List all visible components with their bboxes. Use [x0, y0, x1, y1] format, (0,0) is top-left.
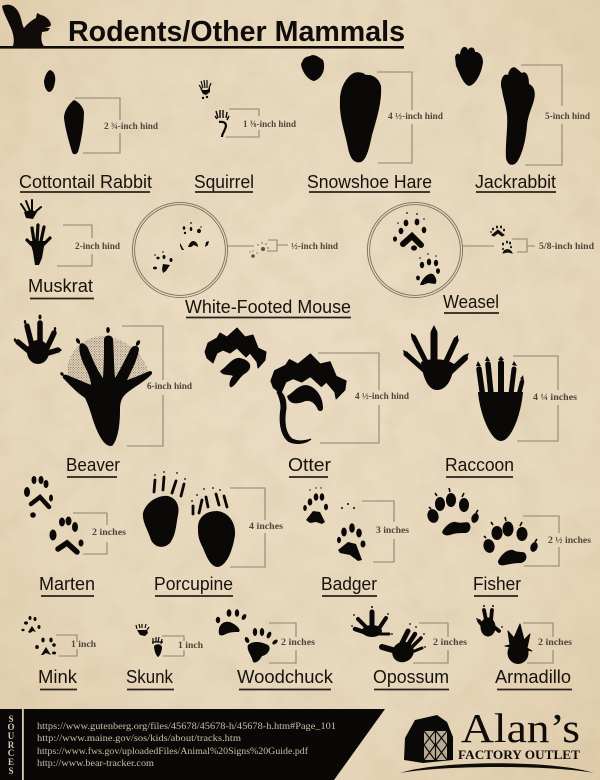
icon: actual size front track: [490, 226, 505, 236]
icon: hind track: [27, 225, 50, 265]
source links: https://www.fws.gov/uploadedFiles/Animal%20Signs%20Guide.pdf: [37, 746, 308, 756]
source links: http://www.bear-tracker.com: [37, 758, 154, 768]
heading: Fisher: [473, 574, 521, 594]
size label: 1 inch: [178, 640, 203, 650]
icon: enlarged track upper: [393, 212, 426, 251]
size label: 2 inches: [281, 637, 316, 647]
sources vertical label: C: [8, 748, 14, 758]
icon: front track: [21, 200, 41, 219]
size bracket: [377, 72, 412, 163]
panel: raccoon: [403, 325, 578, 477]
heading: Otter: [288, 455, 331, 475]
panel: white-footed mouse: [132, 202, 351, 318]
panel: muskrat: [21, 200, 120, 298]
size bracket: [73, 513, 107, 554]
sources vertical label: [7, 714, 15, 776]
size label: 1 inch: [71, 639, 96, 649]
icon: barn: [404, 715, 453, 763]
icon: hind track: [271, 354, 346, 443]
heading: Skunk: [126, 667, 174, 687]
size label: ½-inch hind: [291, 241, 338, 251]
icon: front track: [216, 609, 247, 636]
size label: 1 ⅜-inch hind: [243, 119, 296, 129]
logo: Alan's Factory Outlet: [400, 705, 594, 773]
size label: 4 ¼ inches: [533, 392, 578, 402]
icon: actual size hind track: [502, 240, 512, 253]
icon: front track: [351, 606, 393, 637]
heading: Opossum: [373, 667, 449, 687]
heading: Mink: [38, 667, 78, 687]
panel: cottontail rabbit: [19, 70, 158, 192]
heading: White-Footed Mouse: [185, 297, 351, 317]
panel: weasel: [367, 202, 594, 313]
panel: skunk: [126, 624, 203, 690]
icon: front track: [14, 314, 62, 364]
icon: hind track: [482, 517, 539, 565]
sources vertical label: R: [8, 740, 15, 750]
heading: Porcupine: [154, 574, 233, 594]
size label: 2 inches: [92, 527, 127, 537]
size label: 6-inch hind: [147, 381, 192, 391]
icon: front track: [426, 488, 480, 535]
pointer line: [228, 245, 254, 247]
size bracket: [57, 225, 92, 266]
size label: 4 ½-inch hind: [355, 391, 409, 401]
panel: opossum: [351, 606, 468, 690]
heading: Badger: [321, 574, 377, 594]
sources vertical label: S: [8, 714, 14, 724]
icon: enlarged track lower: [416, 253, 440, 285]
size bracket: [226, 109, 259, 137]
heading: Armadillo: [495, 667, 571, 687]
heading: Muskrat: [28, 276, 93, 296]
icon: stippled web: [68, 336, 148, 395]
heading: Snowshoe Hare: [307, 172, 432, 192]
panel: otter: [205, 328, 409, 477]
size label: 2 ¾-inch hind: [104, 121, 158, 131]
size bracket: [512, 239, 535, 252]
size label: 5/8-inch hind: [539, 241, 594, 251]
panel: jackrabbit: [455, 47, 590, 192]
panel: squirrel: [194, 80, 296, 192]
size bracket: [75, 98, 120, 153]
logo tagline: FACTORY OUTLET: [458, 748, 581, 762]
panel: armadillo: [476, 605, 573, 690]
source links: https://www.gutenberg.org/files/45678/45678-h/45678-h.htm#Page_101: [37, 721, 336, 731]
panel: mink: [21, 616, 96, 690]
icon: enlarged track lower: [153, 251, 172, 273]
magnifier ring: [367, 202, 463, 298]
icon: front track: [136, 624, 149, 636]
icon: hind track: [50, 516, 84, 552]
heading: Beaver: [66, 455, 120, 475]
size label: 4 inches: [249, 521, 284, 531]
size bracket: [267, 240, 288, 251]
size bracket: [521, 65, 562, 165]
panel: snowshoe hare: [301, 55, 443, 192]
icon: front track: [205, 328, 266, 387]
icon: squirrel silhouette: [2, 5, 51, 46]
icon: hind track: [35, 638, 56, 655]
icon: hind track: [244, 628, 279, 663]
size bracket: [230, 488, 265, 567]
size label: 5-inch hind: [545, 111, 590, 121]
panel: beaver: [14, 314, 192, 477]
size bracket: [523, 623, 553, 663]
size label: 2 inches: [433, 637, 468, 647]
source links: http://www.maine.gov/sos/kids/about/tracks.htm: [37, 733, 241, 743]
icon: hind track: [505, 624, 532, 664]
logo swoosh: [400, 763, 594, 773]
title: Rodents/Other Mammals: [68, 16, 405, 48]
size label: 4 ½-inch hind: [388, 111, 443, 121]
size bracket: [362, 501, 394, 562]
icon: front track: [44, 70, 55, 92]
icon: front track: [476, 605, 503, 636]
size bracket: [523, 516, 559, 566]
heading: Raccoon: [445, 455, 514, 475]
panel: sources footer: [0, 709, 385, 780]
heading: Jackrabbit: [475, 172, 556, 192]
icon: front track: [455, 47, 483, 86]
source links: [37, 721, 336, 768]
heading: Marten: [39, 574, 95, 594]
icon: hind track: [152, 637, 163, 657]
size bracket: [56, 635, 77, 656]
size bracket: [513, 356, 558, 441]
icon: enlarged track upper: [180, 222, 209, 250]
icon: hind track: [215, 110, 229, 137]
icon: hind track: [382, 623, 426, 666]
icon: hind track: [60, 327, 152, 446]
panel: fisher: [426, 488, 592, 596]
size label: 2-inch hind: [75, 241, 120, 251]
icon: actual size tracks: [249, 242, 269, 258]
sources vertical label: O: [7, 722, 15, 732]
icon: front track: [21, 616, 40, 633]
icon: hind track: [64, 100, 84, 154]
size label: 2 ½ inches: [548, 535, 592, 545]
icon: hind track: [340, 72, 381, 162]
size label: 2 inches: [538, 637, 573, 647]
size bracket: [413, 623, 448, 663]
sources vertical label: U: [8, 731, 15, 741]
icon: front track: [143, 471, 186, 547]
pointer line: [463, 245, 494, 247]
icon: front track: [403, 325, 469, 390]
icon: front track: [301, 55, 324, 81]
size bracket: [122, 326, 163, 446]
magnifier ring: [132, 202, 228, 298]
panel: porcupine: [143, 471, 284, 596]
footer background: [0, 709, 385, 780]
icon: front track: [303, 487, 328, 524]
panel: marten: [24, 476, 127, 596]
heading: Cottontail Rabbit: [19, 172, 152, 192]
icon: hind track: [476, 356, 524, 441]
icon: hind track: [191, 487, 235, 567]
logo wordmark: Alan’s: [461, 705, 580, 751]
panel: woodchuck: [216, 609, 334, 690]
size label: 3 inches: [376, 525, 410, 535]
icon: hind track: [337, 503, 366, 561]
heading: Squirrel: [194, 172, 254, 192]
size bracket: [318, 353, 379, 443]
icon: front track: [199, 80, 211, 99]
icon: front track: [24, 476, 53, 518]
size bracket: [269, 623, 296, 663]
size bracket: [162, 636, 184, 656]
heading: Weasel: [443, 292, 499, 312]
sources vertical label: S: [8, 766, 14, 776]
panel: badger: [303, 487, 410, 596]
sources vertical label: E: [8, 757, 14, 767]
icon: hind track: [501, 67, 535, 165]
heading: Woodchuck: [237, 667, 334, 687]
